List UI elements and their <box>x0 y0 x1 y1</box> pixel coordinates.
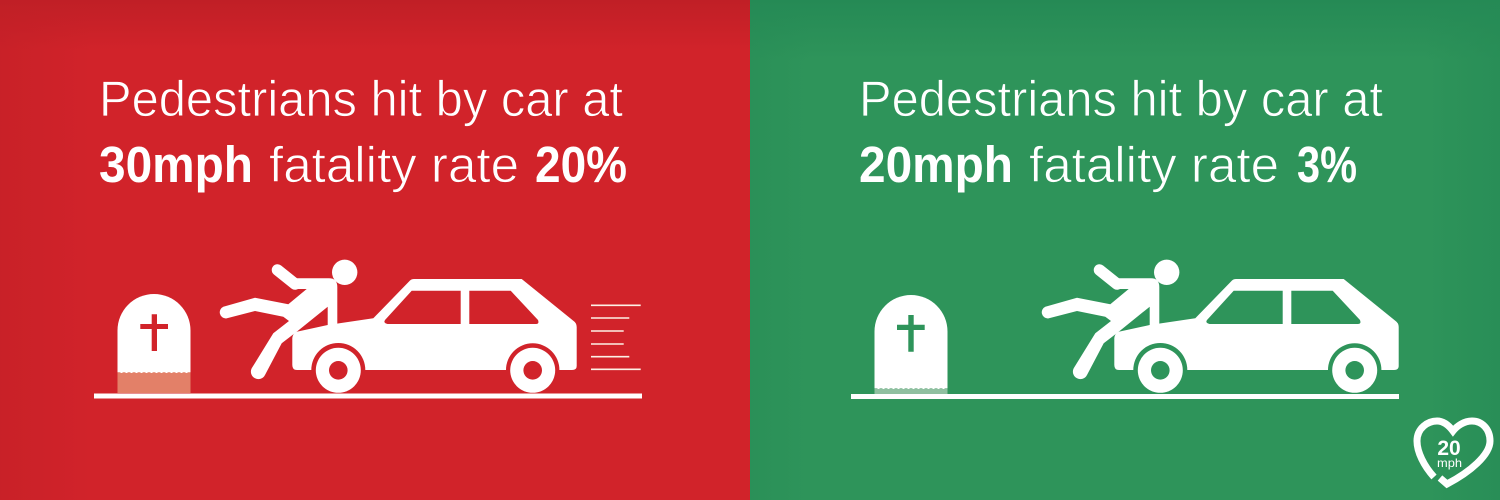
ground line <box>94 394 642 398</box>
heading: 20mph fatality rate: fatality rate <box>1029 137 1279 193</box>
icon: pedestrian being hit <box>220 260 357 379</box>
panel: green 20mph <box>750 0 1500 500</box>
heading: 30mph fatality rate <box>99 71 627 193</box>
heading: 30mph fatality rate: fatality rate <box>269 137 519 193</box>
heading: 30mph fatality rate: 30mph <box>99 136 253 193</box>
icon: tombstone 3% filled <box>874 295 948 394</box>
logo: 20mph heart: mph <box>1437 456 1462 470</box>
heading: 20mph fatality rate: 3% <box>1297 136 1357 193</box>
logo: 20mph heart <box>1417 421 1490 484</box>
icon: tombstone 20% filled <box>118 294 190 393</box>
heading: 30mph fatality rate: 20% <box>535 136 627 193</box>
heading: 20mph fatality rate <box>859 71 1383 193</box>
heading: 30mph fatality rate: Pedestrians hit by car at <box>99 71 623 127</box>
heading: 20mph fatality rate: Pedestrians hit by car at <box>859 71 1383 127</box>
icon: car <box>1114 279 1399 393</box>
heading: 20mph fatality rate: 20mph <box>859 136 1013 193</box>
panel: red 30mph <box>0 0 750 500</box>
logo: 20mph heart: 20 <box>1437 437 1461 460</box>
speed lines <box>591 305 641 369</box>
ground line <box>851 394 1399 399</box>
icon: pedestrian being hit <box>1042 260 1179 379</box>
icon: car <box>292 279 577 393</box>
